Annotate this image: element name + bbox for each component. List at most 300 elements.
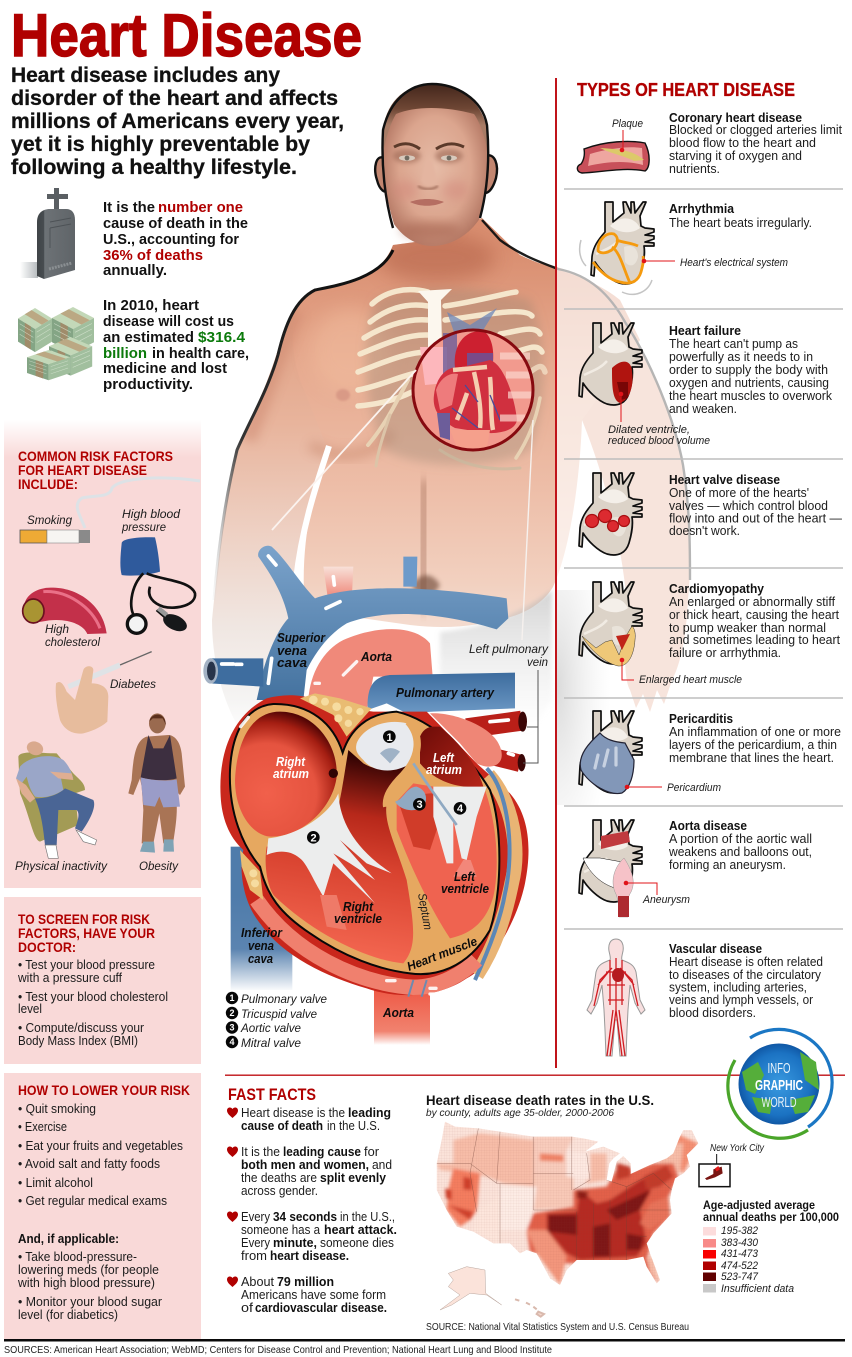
sources footer: SOURCES: American Heart Association; WebMD; Centers for Disease Control and Prevention; National Heart Lung and Blood Institute [4, 1344, 552, 1356]
fact 3: heart disease. [270, 1249, 349, 1263]
blurred rate regions [437, 1130, 698, 1285]
map heading [426, 1092, 654, 1119]
valve numbers: 1 [386, 732, 393, 744]
globe land [742, 1052, 819, 1114]
panel: fast facts [227, 1085, 397, 1315]
fact 1: cause of death [241, 1119, 323, 1133]
papillary muscle right [320, 895, 347, 930]
stat: number one cause [103, 200, 248, 279]
fact 1: leading [348, 1106, 391, 1120]
text: veins and lymph vessels, or [669, 993, 813, 1007]
heart labels: Right [276, 755, 306, 769]
icon: dilated ventricle [579, 323, 642, 422]
type: aorta disease [579, 819, 812, 917]
panel: screening [4, 897, 201, 1064]
fact 2 [241, 1145, 392, 1198]
new york city inset [699, 1154, 730, 1187]
text [669, 942, 823, 1020]
stat: number one cause: cause of death in the [103, 216, 248, 232]
large heart diagram [203, 546, 529, 1045]
label: high blood pressure: High blood [122, 507, 180, 521]
list [17, 958, 168, 1048]
heart labels: ventricle [334, 912, 382, 926]
icon: man in chair [16, 739, 97, 858]
text [669, 202, 812, 230]
text: One of more of the hearts' [669, 486, 809, 500]
logo text [755, 1060, 803, 1111]
mitral valve [433, 787, 487, 863]
list [17, 1102, 183, 1322]
fact 4 [241, 1275, 387, 1315]
state borders [437, 1128, 672, 1260]
heading: COMMON RISK FACTORS [18, 448, 173, 464]
text: Aorta disease [669, 819, 747, 833]
heart labels: Inferior [241, 926, 283, 940]
label: Enlarged heart muscle [639, 674, 742, 686]
text: forming an aneurysm. [669, 858, 786, 872]
type: vascular disease [587, 939, 823, 1056]
icon: heart with electrical system [580, 202, 675, 294]
heart labels: cava [248, 952, 273, 966]
grey shadow under belly [440, 590, 552, 735]
logo text: WORLD [762, 1094, 797, 1111]
bottom section rule [225, 1074, 845, 1076]
valve numbers: 3 [416, 799, 423, 811]
fact 1: Heart disease is the [241, 1106, 345, 1120]
heading: TO SCREEN FOR RISK [18, 911, 150, 927]
icon: circulatory figure [587, 939, 645, 1056]
base counties [436, 1122, 698, 1285]
types panel divider line [555, 78, 557, 1068]
list: • Take blood-pressure- [18, 1250, 137, 1264]
heart labels: Left pulmonary [469, 642, 549, 656]
text: and sometimes leading to heart [669, 633, 841, 647]
icon: obese woman [128, 713, 185, 853]
text: layers of the pericardium, a thin [669, 738, 837, 752]
text: Pericarditis [669, 712, 733, 726]
panel: how to lower risk [4, 1073, 201, 1339]
text: blood flow to the heart and [669, 136, 816, 150]
text: blood disorders. [669, 1006, 756, 1020]
type: arrhythmia [580, 202, 812, 294]
text: to diseases of the circulatory [669, 968, 822, 982]
map source: SOURCE: National Vital Statistics System and U.S. Census Bureau [426, 1322, 689, 1333]
left arm [212, 283, 350, 730]
county grid [437, 1122, 698, 1284]
right shoulder outline [482, 220, 690, 580]
text: doesn't work. [669, 524, 740, 538]
man's body illustration [212, 70, 852, 1070]
valve legend: 3 [229, 1022, 235, 1032]
tricuspid valve [267, 793, 392, 903]
list: • Exercise [18, 1120, 67, 1134]
stat: number one cause: number one [158, 200, 243, 216]
icon: tombstone [20, 188, 75, 279]
heart labels: atrium [426, 763, 462, 777]
hawaii [515, 1299, 544, 1317]
pulmonary vein leader [523, 670, 538, 763]
text: and weaken. [669, 402, 737, 416]
heading: FACTORS, HAVE YOUR [18, 925, 155, 941]
intro paragraph: following a healthy lifestyle. [11, 155, 297, 179]
text: nutrients. [669, 162, 720, 176]
text: system, including arteries, [669, 980, 807, 994]
label: high cholesterol: cholesterol [45, 635, 100, 649]
stat: cost: billion [103, 346, 147, 362]
heart labels: atrium [273, 767, 309, 781]
valve legend: Aortic valve [240, 1021, 301, 1035]
text: weakens and balloons out, [668, 845, 812, 859]
fact 3: minute, [273, 1236, 317, 1250]
title: Heart Disease [11, 2, 362, 69]
left ventricle [397, 783, 497, 938]
intro paragraph [11, 63, 344, 179]
text: An inflammation of one or more [669, 725, 841, 739]
fact 4: cardiovascular disease. [255, 1301, 387, 1315]
label: Plaque [612, 118, 643, 130]
map legend: 383-430 [721, 1237, 759, 1249]
panel: risk factors [4, 420, 201, 888]
heart labels: Heart muscle [405, 934, 479, 974]
valve legend: Tricuspid valve [241, 1007, 317, 1021]
label: high blood pressure: pressure [121, 520, 166, 534]
fact 4: of [241, 1301, 254, 1315]
text: starving it of oxygen and [669, 149, 802, 163]
fact 2: across gender. [241, 1184, 318, 1198]
stat: number one cause: 36% of deaths [103, 248, 203, 264]
icon: hearts [227, 1107, 238, 1287]
left vein tube [204, 658, 263, 687]
label: diabetes: Diabetes [110, 677, 156, 691]
text: the heart muscles to overwork [669, 389, 833, 403]
stat: cost: In 2010, heart [103, 298, 199, 314]
icon: stacks of money [18, 307, 94, 380]
body outline [214, 250, 393, 600]
face [382, 96, 488, 246]
label: smoking: Smoking [27, 513, 72, 527]
stat: number one cause: annually. [103, 263, 167, 279]
text [669, 473, 842, 538]
heart muscle and chambers [230, 704, 499, 974]
brows and eyes [394, 144, 464, 161]
text: Heart valve disease [669, 473, 780, 487]
pulmonary veins [467, 712, 527, 771]
fact 3: Every [241, 1236, 271, 1250]
right atrium [235, 712, 337, 837]
text: failure or arrhythmia. [669, 646, 781, 660]
fact 2: leading cause [283, 1145, 361, 1159]
heart labels: Left [433, 751, 455, 765]
fact 2: and [372, 1158, 392, 1172]
text [669, 582, 841, 660]
list: level (for diabetics) [18, 1308, 118, 1322]
text [669, 712, 841, 765]
text: Blocked or clogged arteries limit [669, 123, 843, 137]
stat: cost: an estimated [103, 330, 194, 346]
fact 1: in the U.S. [327, 1119, 380, 1133]
map legend: 195-382 [721, 1225, 758, 1237]
heart labels: Left [454, 870, 476, 884]
label: high cholesterol [45, 622, 100, 649]
valve number markers [307, 730, 466, 844]
heart lower band [257, 900, 477, 987]
fact 2: It is the [241, 1145, 280, 1159]
right arm [540, 262, 690, 712]
fat deposits [240, 693, 372, 900]
footer rule [4, 1339, 845, 1342]
heading: DOCTOR: [18, 939, 76, 955]
icon: blood pressure cuff [120, 537, 195, 635]
list: • Eat your fruits and vegetables [18, 1139, 183, 1153]
choropleth map of the U.S. [420, 1113, 730, 1317]
pulmonary valve [356, 722, 415, 770]
heading: INCLUDE: [18, 476, 78, 492]
text: Cardiomyopathy [669, 582, 764, 596]
icon: valves [579, 473, 642, 555]
label: Dilated ventricle, [608, 424, 690, 436]
arm gap [296, 446, 329, 580]
nose and mouth [410, 160, 444, 206]
label: high cholesterol: High [45, 622, 69, 636]
head outline [382, 84, 488, 228]
heart right side band [477, 775, 515, 975]
chest vessels [447, 308, 497, 335]
alaska [440, 1267, 502, 1310]
fact 3 [241, 1210, 397, 1263]
icon: enlarged muscle [579, 582, 642, 680]
aortic valve [395, 787, 426, 810]
type: cardiomyopathy [579, 582, 841, 686]
fact 1 [241, 1106, 391, 1133]
type: pericarditis [579, 711, 841, 794]
types heading: TYPES OF HEART DISEASE [577, 80, 795, 100]
text: Heart disease is often related [669, 955, 823, 969]
heading [18, 911, 155, 955]
valve legend: Mitral valve [241, 1036, 301, 1050]
map legend: Insufficient data [721, 1283, 794, 1295]
stat: cost: productivity. [103, 377, 193, 393]
aorta [308, 629, 433, 710]
body shading [248, 234, 495, 612]
map legend: 523-747 [721, 1271, 759, 1283]
icon: artery with plaque [577, 130, 649, 173]
text: Arrhythmia [669, 202, 735, 216]
left atrium [420, 727, 483, 787]
heart location circle [413, 330, 533, 450]
text: flow into and out of the heart — [669, 512, 842, 526]
valve numbers [310, 732, 464, 844]
upper aorta branch [323, 567, 353, 602]
heading: FAST FACTS [228, 1085, 316, 1104]
label: reduced blood volume [608, 435, 710, 447]
logo text: INFO [768, 1060, 790, 1077]
stat: number one cause: U.S., accounting for [103, 232, 239, 248]
list: • Monitor your blood sugar [18, 1295, 162, 1309]
fact 4: About [241, 1275, 275, 1289]
icon: hand with syringe [56, 652, 152, 734]
text [668, 819, 812, 872]
list: level [18, 1002, 42, 1016]
fact 4: Americans have some form [241, 1288, 386, 1302]
map legend: 431-473 [721, 1248, 759, 1260]
heart labels: Aorta [382, 1006, 414, 1020]
heart labels: cava [277, 656, 307, 670]
type: coronary heart disease [577, 111, 843, 176]
grey shadow behind right panel [557, 590, 617, 805]
fact 3: from [241, 1249, 267, 1263]
intro paragraph: yet it is highly preventable by [11, 132, 310, 156]
white overlay on types panel [557, 70, 852, 1070]
head [375, 84, 497, 246]
face shading [392, 149, 468, 238]
right ventricle [266, 750, 413, 963]
logo text: GRAPHIC [755, 1077, 803, 1094]
text: membrane that lines the heart. [669, 751, 834, 765]
label: obesity: Obesity [139, 859, 179, 873]
list: And, if applicable: [18, 1232, 119, 1246]
label: physical inactivity: Physical inactivity [15, 859, 108, 873]
fact 2: for [364, 1145, 379, 1159]
heart exterior [220, 695, 529, 995]
text: or thick heart, causing the heart [669, 608, 840, 622]
text: to pump weaker than normal [669, 621, 826, 635]
text: valves — which control blood [669, 499, 828, 513]
valve legend: 4 [229, 1037, 235, 1047]
intro paragraph: disorder of the heart and affects [11, 86, 338, 110]
fact 2: the deaths are [241, 1171, 317, 1185]
torso [293, 218, 640, 627]
heart labels: Aorta [360, 650, 392, 664]
left ear [375, 157, 390, 192]
map legend: 474-522 [721, 1260, 758, 1272]
heart labels: Superior [277, 631, 326, 645]
list: • Quit smoking [18, 1102, 96, 1116]
map heading: Heart disease death rates in the U.S. [426, 1092, 654, 1108]
icon: pericardium [579, 711, 662, 793]
fact 3: someone has a [241, 1223, 320, 1237]
heading [18, 448, 173, 492]
fact 4: 79 million [277, 1275, 334, 1289]
list: • Test your blood pressure [18, 958, 155, 972]
fact 3: heart attack. [324, 1223, 397, 1237]
inferior vena cava [231, 847, 292, 990]
heart labels: vena [248, 939, 274, 953]
heading: HOW TO LOWER YOUR RISK [18, 1082, 190, 1098]
text: oxygen and nutrients, causing [669, 376, 829, 390]
right ear [481, 155, 497, 193]
pulmonary artery [368, 673, 515, 713]
stat: cost: medicine and lost [103, 361, 227, 377]
map legend [703, 1200, 839, 1295]
stat: cost [103, 298, 249, 393]
highlights [241, 662, 436, 994]
heart labels: ventricle [441, 882, 489, 896]
text: powerfully as it needs to in [669, 350, 813, 364]
superior vena cava and arch [257, 546, 508, 700]
left atrium appendage [430, 713, 502, 767]
lower aorta [374, 990, 430, 1045]
fact 2: both men and women, [241, 1158, 369, 1172]
fact 3: Every [241, 1210, 271, 1224]
stat: number one cause: It is the [103, 200, 155, 216]
valve numbers: 2 [310, 832, 317, 844]
icon: aneurysm [579, 820, 657, 917]
list: with a pressure cuff [17, 971, 123, 985]
heart labels: Pulmonary artery [396, 686, 495, 700]
type: heart valve disease [579, 473, 842, 555]
text [669, 111, 843, 176]
heart labels [241, 631, 549, 1020]
heart labels: Right [343, 900, 374, 914]
list: • Limit alcohol [18, 1176, 93, 1190]
list: • Avoid salt and fatty foods [18, 1157, 160, 1171]
list: Body Mass Index (BMI) [18, 1034, 138, 1048]
list: with high blood pressure) [17, 1276, 155, 1290]
label: Aneurysm [642, 894, 690, 906]
label: Heart's electrical system [680, 257, 788, 269]
list: lowering meds (for people [18, 1263, 159, 1277]
heart labels: vena [277, 644, 307, 658]
valve legend [226, 992, 327, 1050]
list: • Get regular medical exams [18, 1194, 167, 1208]
text: The heart can't pump as [669, 337, 798, 351]
text: order to supply the body with [669, 363, 828, 377]
fact 3: in the U.S., [340, 1210, 395, 1224]
hair [382, 84, 489, 155]
intro paragraph: Heart disease includes any [11, 63, 280, 87]
label: high blood pressure [121, 507, 180, 534]
heading: FOR HEART DISEASE [18, 462, 147, 478]
text [669, 324, 833, 416]
icon: clogged artery [23, 588, 107, 634]
text: A portion of the aortic wall [669, 832, 812, 846]
text: The heart beats irregularly. [669, 216, 812, 230]
logo: infographic world [728, 1029, 832, 1138]
stat: cost: in health care, [152, 346, 249, 362]
text: Vascular disease [669, 942, 762, 956]
fact 2: split evenly [320, 1171, 386, 1185]
stat: cost: $316.4 [198, 330, 245, 346]
heart labels: vein [527, 655, 548, 669]
nipple [336, 389, 350, 401]
valve legend: 1 [229, 993, 235, 1003]
pointer lines from circle to large heart [272, 370, 533, 640]
label [608, 424, 710, 447]
label: Pericardium [667, 782, 721, 794]
fact 3: someone dies [320, 1236, 394, 1250]
text: Coronary heart disease [669, 111, 802, 125]
list: • Compute/discuss your [18, 1021, 144, 1035]
ribcage [358, 289, 545, 469]
map heading: by county, adults age 35-older, 2000-2006 [426, 1107, 614, 1119]
valve legend: Pulmonary valve [241, 992, 327, 1006]
new york city label: New York City [710, 1142, 765, 1154]
heart labels: Septum [415, 892, 435, 931]
valve numbers: 4 [457, 803, 464, 815]
valve legend: 2 [229, 1008, 235, 1018]
circled heart [420, 347, 447, 385]
fact 3: 34 seconds [273, 1210, 337, 1224]
text: Heart failure [669, 324, 741, 338]
map legend: annual deaths per 100,000 [703, 1212, 839, 1224]
stat: cost: disease will cost us [103, 314, 234, 330]
map legend: Age-adjusted average [703, 1200, 815, 1212]
list: • Test your blood cholesterol [18, 990, 168, 1004]
icon: cigarette [20, 478, 200, 543]
text: An enlarged or abnormally stiff [669, 595, 836, 609]
intro paragraph: millions of Americans every year, [11, 109, 344, 133]
sternum [418, 289, 452, 352]
